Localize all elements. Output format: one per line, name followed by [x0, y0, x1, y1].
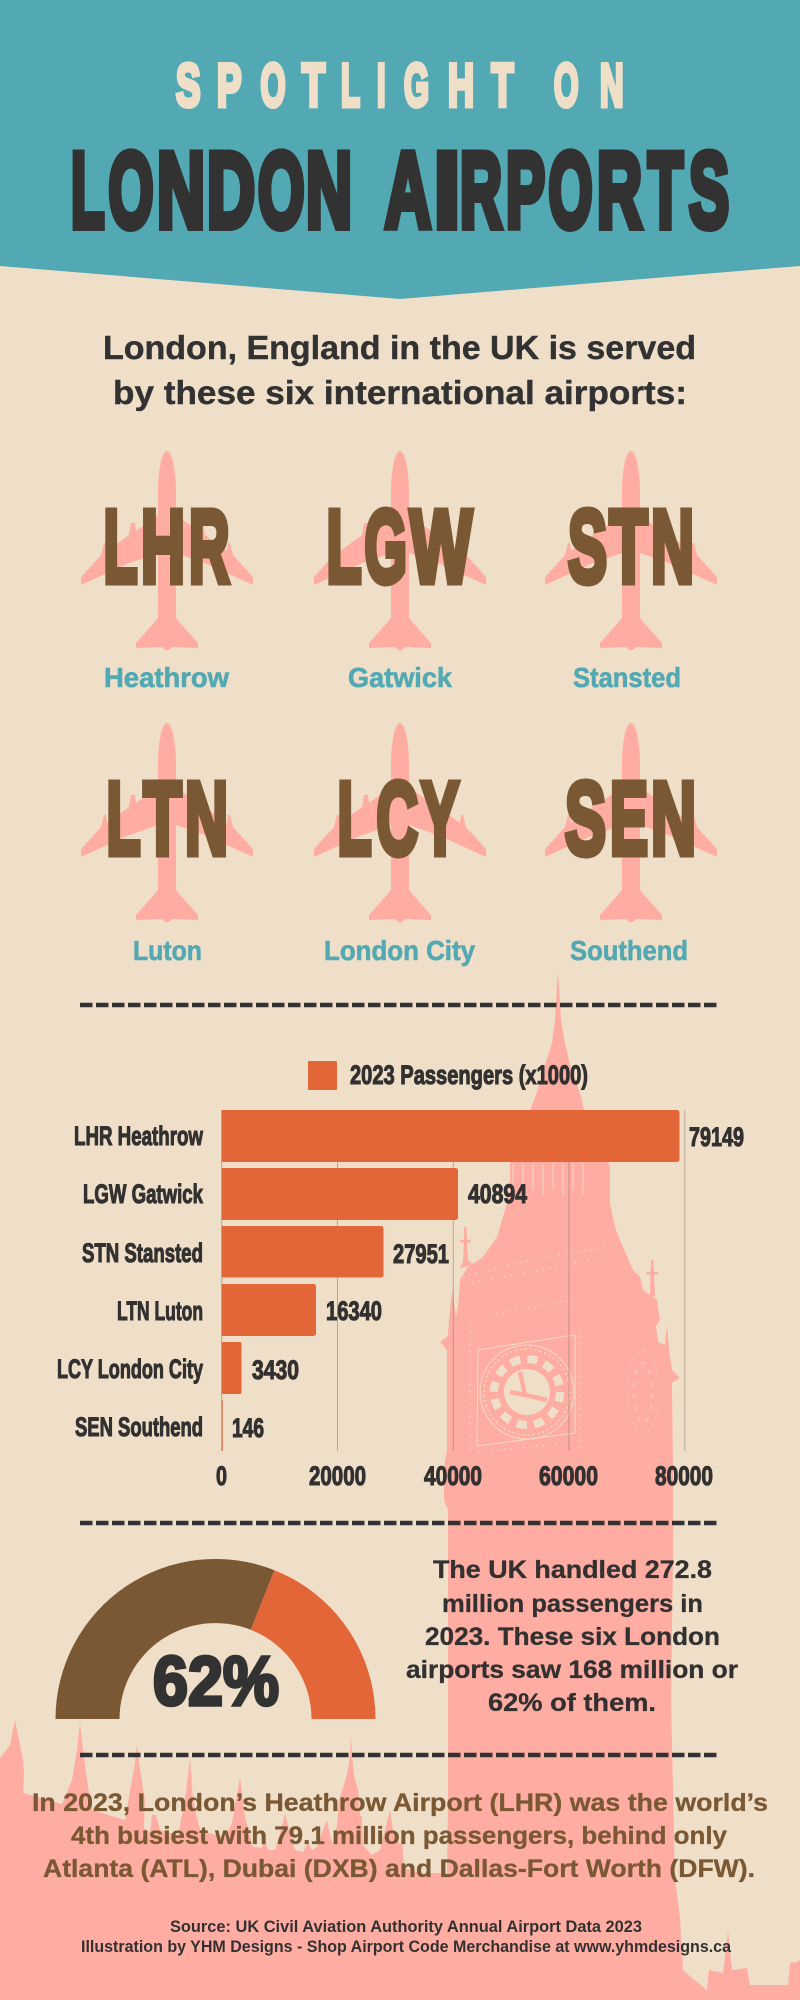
title line: Spotlight on: P: [217, 52, 242, 119]
icon: plane: [81, 723, 253, 923]
title line: London Airports: O: [548, 130, 592, 250]
value labels: 16340: [326, 1296, 382, 1326]
airport code: Y: [421, 761, 459, 876]
value labels: 27951: [393, 1239, 449, 1269]
title line: Spotlight on: S: [176, 52, 200, 119]
text block: Heathrow ranking: Atlanta (ATL), Dubai (DXB) and Dallas-Fort Worth (DFW).: [43, 1855, 755, 1883]
header banner: [0, 0, 800, 299]
airport code: L: [338, 761, 372, 876]
airport: London City: [314, 723, 486, 966]
intro heading: by these six international airports:: [113, 374, 687, 411]
airport name: Stansted: [573, 662, 681, 693]
airport code: [338, 761, 459, 876]
gauge: 62 percent: [55, 1559, 375, 1720]
airport code: S: [565, 761, 606, 876]
airport code: L: [326, 489, 362, 604]
airport code: W: [410, 489, 472, 604]
axis labels: 20000: [309, 1461, 366, 1491]
source credits: Source: UK Civil Aviation Authority Annual Airport Data 2023: [170, 1918, 642, 1936]
airport: Heathrow: [81, 451, 253, 693]
source credits: Illustration by YHM Designs - Shop Airport Code Merchandise at www.yhmdesigns.ca: [81, 1938, 732, 1956]
airport: Gatwick: [314, 451, 486, 693]
illustration: Big Ben and Parliament silhouette: [0, 973, 800, 2000]
title line: London Airports: R: [460, 130, 502, 250]
airport name: Gatwick: [348, 662, 452, 693]
title: [71, 52, 729, 250]
value labels: 40894: [468, 1179, 527, 1209]
category labels: LTN Luton: [117, 1296, 203, 1326]
airport code: [326, 489, 472, 604]
source credits: [81, 1918, 732, 1956]
title line: London Airports: D: [207, 130, 255, 250]
airport code: T: [610, 489, 648, 604]
airport code: L: [104, 489, 138, 604]
title line: London Airports: I: [434, 130, 460, 250]
text block: Heathrow ranking: In 2023, London’s Heathrow Airport (LHR) was the world’s: [32, 1789, 768, 1817]
icon: plane: [314, 723, 486, 923]
title line: Spotlight on: N: [600, 52, 624, 119]
airport name: Heathrow: [104, 662, 229, 693]
airport name: Luton: [133, 935, 202, 966]
title line: London Airports: O: [108, 130, 154, 250]
text block: UK passenger totals: [406, 1556, 738, 1717]
icon: plane: [314, 451, 486, 651]
title line: London Airports: A: [385, 130, 431, 250]
text block: Heathrow ranking: [32, 1789, 768, 1883]
airport code: [565, 761, 696, 876]
axis labels: 80000: [655, 1461, 713, 1491]
bar chart: 2023 passengers: [57, 1060, 744, 1491]
text block: UK passenger totals: airports saw 168 million or: [406, 1656, 738, 1684]
icon: plane: [545, 451, 717, 651]
legend: [308, 1060, 588, 1090]
value labels: 3430: [252, 1355, 299, 1385]
title line: London Airports: N: [306, 130, 352, 250]
value labels: [232, 1122, 744, 1443]
title line: Spotlight on: [176, 52, 624, 119]
legend: 2023 Passengers (x1000): [350, 1060, 588, 1090]
airport code: S: [568, 489, 607, 604]
airport code: R: [189, 489, 230, 604]
value labels: 146: [232, 1413, 264, 1443]
text block: Heathrow ranking: 4th busiest with 79.1 million passengers, behind only: [71, 1822, 727, 1850]
title line: Spotlight on: T: [302, 52, 325, 119]
airport code: H: [141, 489, 185, 604]
title line: Spotlight on: G: [404, 52, 429, 119]
airport: Southend: [545, 723, 717, 966]
category labels: LHR Heathrow: [74, 1121, 204, 1151]
title line: Spotlight on: I: [377, 52, 386, 119]
text block: UK passenger totals: 62% of them.: [488, 1689, 656, 1717]
title line: London Airports: T: [648, 130, 683, 250]
text block: UK passenger totals: The UK handled 272.8: [433, 1556, 712, 1584]
title line: Spotlight on: T: [492, 52, 514, 119]
title line: London Airports: R: [597, 130, 642, 250]
bars: [222, 1110, 679, 1451]
axis labels: 60000: [539, 1461, 598, 1491]
axis labels: 0: [216, 1461, 227, 1491]
text block: UK passenger totals: 2023. These six London: [425, 1623, 720, 1651]
title line: Spotlight on: O: [554, 52, 578, 119]
title line: London Airports: S: [689, 130, 729, 250]
airport code: [106, 761, 228, 876]
title line: Spotlight on: O: [260, 52, 286, 119]
category labels: STN Stansted: [82, 1238, 203, 1268]
category labels: LCY London City: [57, 1354, 203, 1384]
airport name: Southend: [570, 935, 688, 966]
category labels: LGW Gatwick: [83, 1179, 204, 1209]
airport name: London City: [324, 935, 475, 966]
intro heading: [103, 329, 696, 411]
airport code: N: [651, 761, 696, 876]
airport: Luton: [81, 723, 253, 966]
category labels: SEN Southend: [75, 1412, 203, 1442]
title line: London Airports: P: [506, 130, 545, 250]
text block: UK passenger totals: million passengers in: [442, 1590, 703, 1618]
airport code: [104, 489, 230, 604]
title line: London Airports: [71, 130, 729, 250]
airport code: G: [364, 489, 407, 604]
value labels: 79149: [689, 1122, 744, 1152]
title line: Spotlight on: L: [341, 52, 360, 119]
title line: London Airports: O: [258, 130, 304, 250]
category labels: [57, 1121, 204, 1442]
airport code: E: [610, 761, 648, 876]
airport code: [568, 489, 694, 604]
airport: Stansted: [545, 451, 717, 693]
icon: plane: [545, 723, 717, 923]
airport code: N: [185, 761, 228, 876]
title line: London Airports: L: [71, 130, 104, 250]
title line: London Airports: N: [157, 130, 205, 250]
gauge value: 62%: [153, 1642, 279, 1720]
title line: Spotlight on: H: [448, 52, 474, 119]
axis labels: 40000: [424, 1461, 482, 1491]
icon: plane: [81, 451, 253, 651]
axis labels: [216, 1461, 713, 1491]
airport code: L: [106, 761, 140, 876]
airport code: C: [376, 761, 418, 876]
airport code: T: [144, 761, 182, 876]
intro heading: London, England in the UK is served: [103, 329, 696, 366]
airport code: N: [651, 489, 694, 604]
